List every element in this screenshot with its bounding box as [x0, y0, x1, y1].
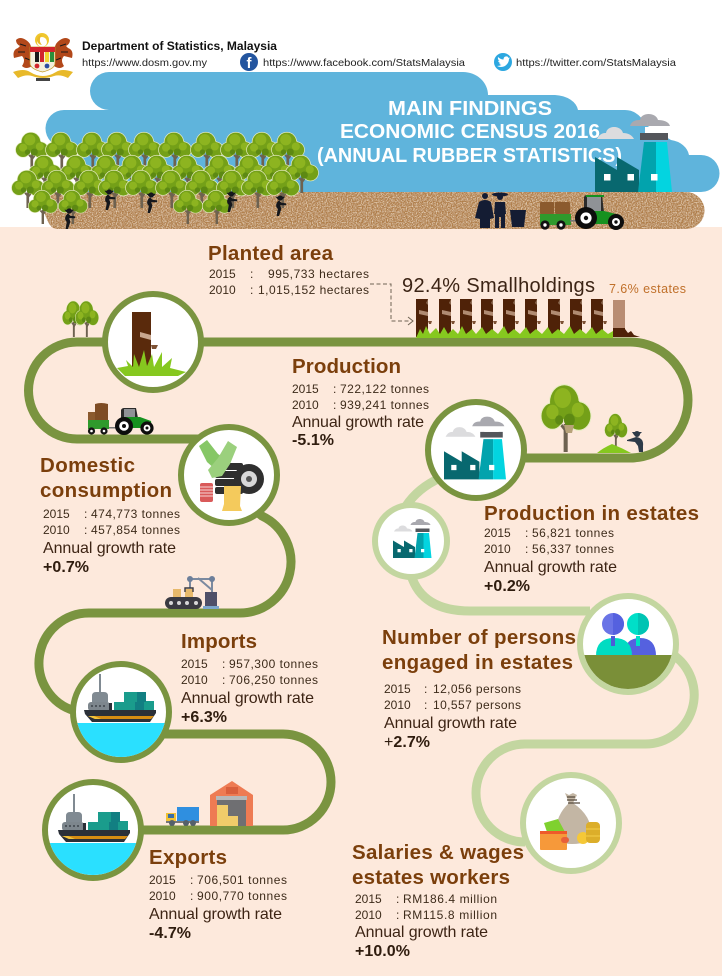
- panel: planted area: [105, 242, 369, 390]
- icon: tractor on path: [88, 403, 154, 435]
- production values: :: [333, 382, 336, 396]
- persons values: :: [424, 698, 427, 712]
- exports values: 706,501 tonnes: [197, 873, 287, 887]
- persons values: 10,557 persons: [433, 698, 521, 712]
- production values: 939,241 tonnes: [340, 398, 429, 412]
- salaries values: Annual growth rate: [355, 924, 488, 941]
- domestic consumption values: :: [84, 507, 87, 521]
- production in estates values: 2010: [484, 542, 511, 556]
- domestic consumption values: 2015: [43, 507, 70, 521]
- production in estates values: 56,821 tonnes: [532, 526, 614, 540]
- salaries values: :: [396, 908, 399, 922]
- heading: exports: Exports: [149, 846, 227, 869]
- panel: imports: [70, 630, 318, 763]
- header text: [82, 41, 278, 69]
- imports values: 706,250 tonnes: [229, 673, 318, 687]
- salaries values: :: [396, 892, 399, 906]
- icon: tapped trees and worker: [540, 384, 643, 453]
- domestic consumption values: :: [84, 523, 87, 537]
- domestic consumption values: 474,773 tonnes: [91, 507, 180, 521]
- planted area values: 2010: [209, 283, 236, 297]
- production in estates values: +0.2%: [484, 578, 530, 595]
- imports values: 2015: [181, 657, 208, 671]
- imports values: +6.3%: [181, 709, 227, 726]
- estates label: 7.6% estates: [609, 282, 686, 296]
- title: ECONOMIC CENSUS 2016: [340, 120, 600, 143]
- persons values: Annual growth rate: [384, 715, 517, 732]
- production in estates values: 2015: [484, 526, 511, 540]
- salaries values: +10.0%: [355, 943, 410, 960]
- planted area values: [209, 267, 369, 297]
- icon: farmers and bucket: [475, 192, 526, 228]
- imports values: 957,300 tonnes: [229, 657, 318, 671]
- smallholdings label: 92.4% Smallholdings: [402, 275, 595, 297]
- salaries values: [355, 892, 497, 960]
- exports values: :: [190, 889, 193, 903]
- icon: rubber tree in circle: [105, 294, 201, 390]
- persons values: :: [424, 682, 427, 696]
- title: (ANNUAL RUBBER STATISTICS): [317, 144, 622, 167]
- domestic consumption values: [43, 507, 180, 576]
- production in estates values: 56,337 tonnes: [532, 542, 614, 556]
- production in estates values: :: [525, 542, 528, 556]
- planted area values: :: [250, 267, 253, 281]
- production in estates values: :: [525, 526, 528, 540]
- icon: ship in circle: [70, 664, 172, 763]
- heading: production: Production: [292, 355, 401, 378]
- exports values: Annual growth rate: [149, 906, 282, 923]
- production in estates values: [484, 526, 617, 595]
- heading: salaries and wages: Salaries & wages: [352, 841, 524, 864]
- domestic consumption values: +0.7%: [43, 559, 89, 576]
- production values: 2010: [292, 398, 319, 412]
- icon: rubber tappers: [64, 189, 286, 229]
- secondary path: [406, 478, 694, 842]
- icon: truck: [166, 807, 199, 826]
- icon: facebook: [240, 53, 258, 72]
- domestic consumption values: 457,854 tonnes: [91, 523, 180, 537]
- planted area values: :: [250, 283, 253, 297]
- production values: :: [333, 398, 336, 412]
- icon: banner factory: [595, 114, 672, 192]
- production values: 722,122 tonnes: [340, 382, 429, 396]
- production values: Annual growth rate: [292, 414, 424, 431]
- heading: number of persons engaged: Number of persons: [382, 626, 576, 649]
- production values: 2015: [292, 382, 319, 396]
- icon: ship in circle: [42, 782, 144, 881]
- exports values: -4.7%: [149, 925, 191, 942]
- icon: rubber plantation trees: [11, 132, 319, 224]
- imports values: :: [222, 673, 225, 687]
- facebook link: https://www.facebook.com/StatsMalaysia: [263, 57, 465, 69]
- icon: banner tractor and trailer: [540, 195, 624, 230]
- soil strip: [44, 192, 704, 229]
- imports values: 2010: [181, 673, 208, 687]
- persons values: 12,056 persons: [433, 682, 521, 696]
- heading: production in estates: Production in estates: [484, 502, 699, 525]
- salaries values: RM186.4 million: [403, 892, 497, 906]
- icon: facebook: f: [246, 55, 252, 72]
- persons values: [384, 682, 521, 751]
- title: MAIN FINDINGS: [388, 97, 552, 120]
- heading: number of persons engaged: [382, 626, 576, 674]
- header text: https://www.dosm.gov.my: [82, 57, 208, 69]
- heading: domestic consumption: [40, 454, 172, 502]
- salaries values: 2010: [355, 908, 382, 922]
- twitter link: https://twitter.com/StatsMalaysia: [516, 57, 676, 69]
- exports values: 900,770 tonnes: [197, 889, 287, 903]
- panel: salaries and wages: [352, 775, 619, 960]
- domestic consumption values: 2010: [43, 523, 70, 537]
- icon: small factory in circle: [375, 505, 447, 577]
- imports values: [181, 657, 318, 726]
- persons values: 2010: [384, 698, 411, 712]
- salaries values: RM115.8 million: [403, 908, 497, 922]
- icon: warehouse: [210, 781, 253, 826]
- panel: number of persons engaged: [382, 596, 676, 751]
- production values: [292, 382, 429, 449]
- header: crest: [13, 33, 73, 81]
- pictogram: tree trunks: [416, 299, 640, 338]
- persons values: +2.7%: [384, 734, 430, 751]
- icon: two small trees: [62, 301, 99, 337]
- heading: salaries and wages: [352, 841, 524, 889]
- imports values: :: [222, 657, 225, 671]
- imports values: Annual growth rate: [181, 690, 314, 707]
- main path: [28, 342, 688, 830]
- planted area values: 995,733 hectares: [268, 267, 369, 281]
- production values: -5.1%: [292, 432, 334, 449]
- heading: number of persons engaged: engaged in estates: [382, 651, 573, 674]
- heading: planted area: Planted area: [208, 242, 334, 265]
- planted area values: 2015: [209, 267, 236, 281]
- exports values: [149, 873, 287, 942]
- production in estates values: Annual growth rate: [484, 559, 617, 576]
- icon: factory in circle: [428, 402, 524, 498]
- icon: money bag, wallet and coins: [523, 775, 619, 871]
- cloud banner: [46, 72, 720, 192]
- exports values: 2015: [149, 873, 176, 887]
- heading: domestic consumption: Domestic: [40, 454, 135, 477]
- icon: twitter: [494, 53, 512, 71]
- arrow: dashed connector: [370, 284, 413, 325]
- panel: production in estates: [375, 502, 699, 595]
- planted area values: 1,015,152 hectares: [258, 283, 369, 297]
- title: [317, 97, 622, 167]
- panel: production: [292, 355, 524, 498]
- salaries values: 2015: [355, 892, 382, 906]
- exports values: :: [190, 873, 193, 887]
- heading: domestic consumption: consumption: [40, 479, 172, 502]
- persons values: 2015: [384, 682, 411, 696]
- heading: imports: Imports: [181, 630, 257, 653]
- icon: robot arm and conveyor: [165, 576, 219, 609]
- heading: salaries and wages: estates workers: [352, 866, 510, 889]
- domestic consumption values: Annual growth rate: [43, 540, 176, 557]
- icon: two persons in circle: [580, 596, 676, 695]
- panel: exports: [42, 782, 287, 942]
- exports values: 2010: [149, 889, 176, 903]
- icon: gloves, tyres, boot and spool: [181, 427, 277, 523]
- panel: domestic consumption: [40, 427, 277, 576]
- header text: Department of Statistics, Malaysia: [82, 41, 278, 53]
